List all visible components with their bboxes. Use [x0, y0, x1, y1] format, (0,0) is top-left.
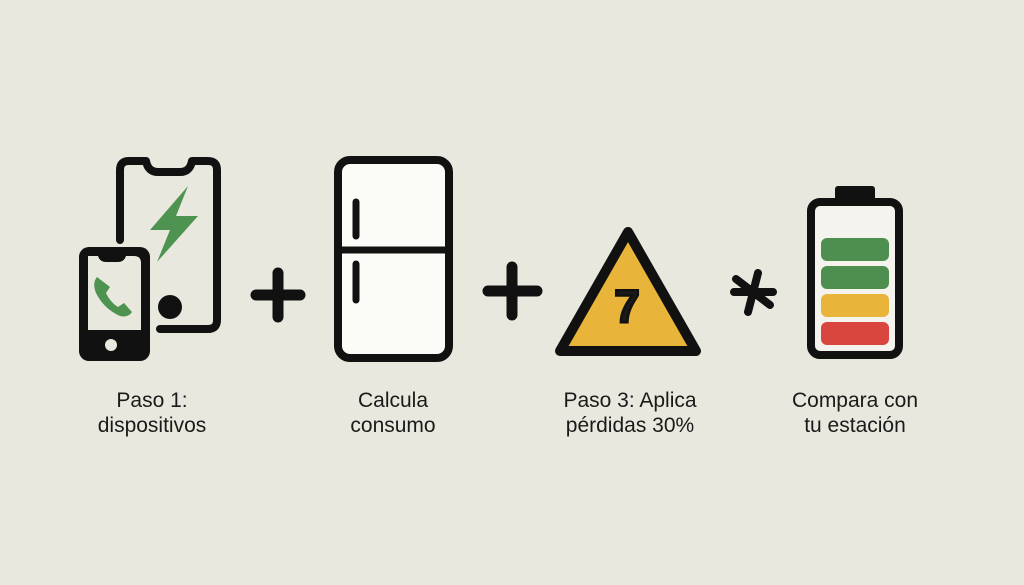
icon: handset — [94, 277, 132, 316]
label 4: tu estación — [804, 414, 906, 437]
icon: battery — [811, 186, 899, 355]
icon: warning triangle: 7 — [614, 280, 640, 332]
label 2: consumo — [350, 414, 436, 437]
icon: lightning bolt — [150, 186, 198, 262]
asterisk — [734, 273, 773, 312]
label 3: Paso 3: Aplica — [563, 389, 697, 412]
icon: fridge — [338, 160, 449, 358]
label 3: pérdidas 30% — [566, 414, 694, 437]
label 2: Calcula — [358, 389, 428, 412]
label 1: dispositivos — [98, 414, 206, 437]
plus sign 1 — [256, 273, 300, 317]
label 4: Compara con — [792, 389, 918, 412]
label 1: Paso 1: — [116, 389, 188, 412]
icon: warning triangle — [560, 232, 696, 351]
plus sign 2 — [488, 267, 537, 315]
icon: phones — [79, 161, 217, 361]
